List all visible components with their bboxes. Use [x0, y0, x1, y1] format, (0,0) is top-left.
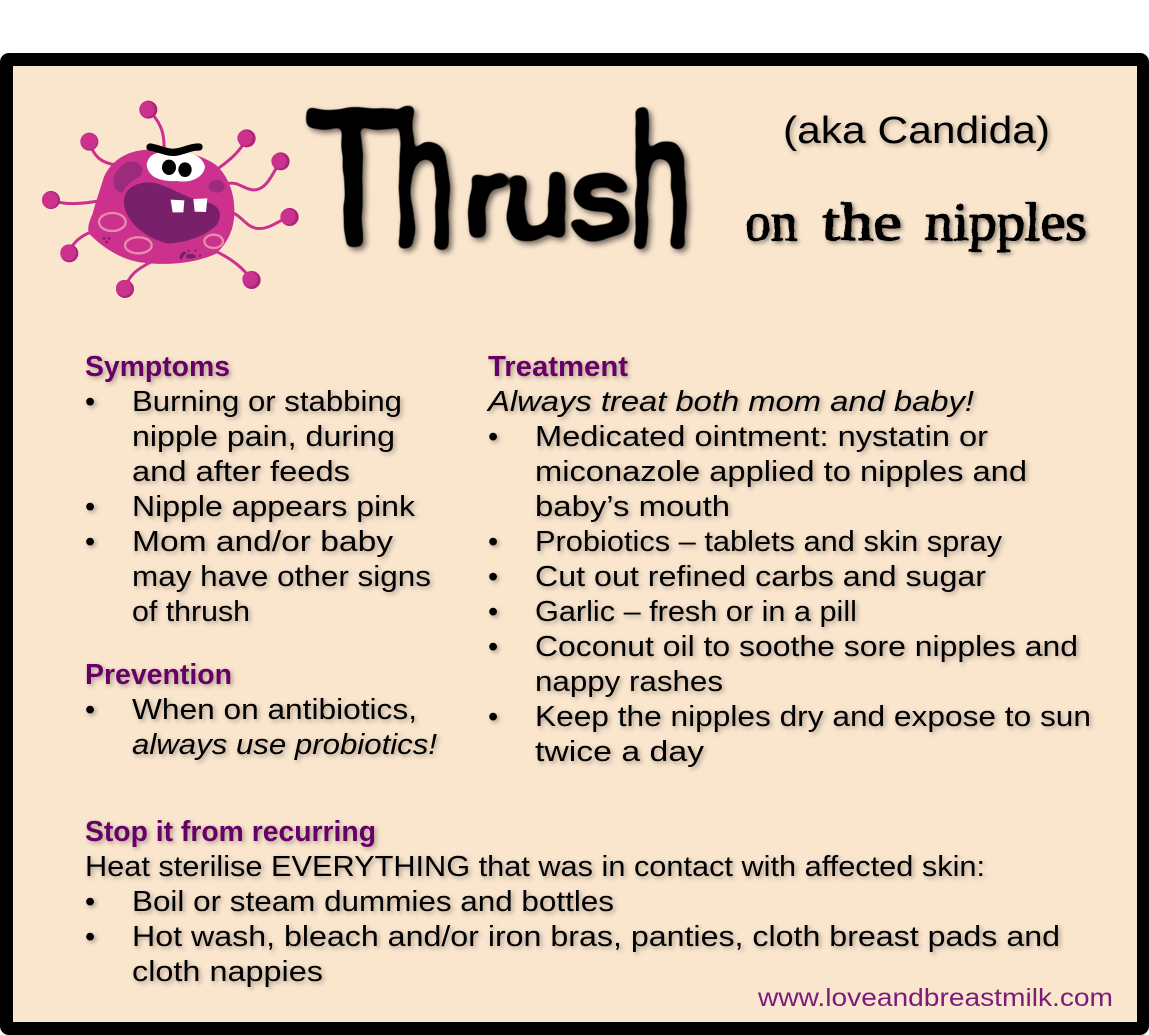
list: treatment: Probiotics – tablets and skin spray	[535, 526, 1003, 558]
icon: angry pink germ	[42, 101, 299, 298]
website credit: www.loveandbreastmilk.com	[757, 984, 1113, 1012]
heading: prevention: Prevention	[85, 659, 232, 691]
panel: symptoms	[85, 351, 431, 628]
panel: treatment	[486, 351, 1091, 768]
subtitle: on the nipples	[745, 192, 1087, 252]
list: recurring: cloth nappies	[132, 956, 323, 988]
list: symptoms	[85, 386, 431, 628]
list: treatment	[488, 421, 1091, 768]
heading: treatment: Treatment	[488, 351, 628, 383]
list: treatment: Medicated ointment: nystatin or	[535, 421, 988, 453]
germ tips	[42, 101, 299, 298]
list: treatment: baby’s mouth	[535, 491, 730, 523]
subtitle: aka Candida: (aka Candida)	[783, 110, 1050, 152]
list: treatment: •	[488, 596, 498, 628]
list: treatment: Coconut oil to soothe sore nipples and	[535, 631, 1078, 663]
title: Thrush: h	[630, 75, 690, 287]
list: treatment: miconazole applied to nipples and	[535, 456, 1027, 488]
panel: stop it from recurring	[85, 816, 1060, 988]
title: Thrush	[305, 68, 690, 288]
list: symptoms: Mom and/or baby	[132, 526, 394, 558]
list: treatment: •	[488, 561, 498, 593]
list: treatment: twice a day	[535, 736, 705, 768]
list: treatment: •	[488, 526, 498, 558]
title: Thrush: rus	[464, 135, 630, 260]
list: treatment: Garlic – fresh or in a pill	[535, 596, 857, 628]
subtitle: on the nipples: on	[745, 192, 797, 252]
list: recurring: •	[85, 921, 95, 953]
panel: prevention	[85, 659, 437, 761]
heading: symptoms: Symptoms	[85, 351, 230, 383]
list: symptoms: of thrush	[132, 596, 250, 628]
subtitle: on the nipples: nipples	[925, 192, 1087, 252]
list: treatment: Cut out refined carbs and sugar	[535, 561, 986, 593]
list: treatment: •	[488, 701, 498, 733]
list: recurring	[85, 886, 1060, 988]
subtitle: on the nipples: the	[822, 192, 902, 252]
list: prevention: When on antibiotics,	[132, 694, 417, 726]
list: symptoms: •	[85, 386, 95, 418]
list: prevention: always use probiotics!	[132, 729, 437, 761]
list: recurring: •	[85, 886, 95, 918]
title: Thrush: h	[394, 75, 454, 287]
note: treat both: Always treat both mom and baby!	[486, 386, 974, 418]
list: symptoms: may have other signs	[132, 561, 431, 593]
list: symptoms: Nipple appears pink	[132, 491, 416, 523]
list: treatment: nappy rashes	[535, 666, 723, 698]
list: symptoms: •	[85, 491, 95, 523]
list: recurring: Boil or steam dummies and bottles	[132, 886, 614, 918]
list: prevention: •	[85, 694, 95, 726]
list: recurring: Hot wash, bleach and/or iron bras, panties, cloth breast pads and	[132, 921, 1060, 953]
heading: recurring: Stop it from recurring	[85, 816, 376, 848]
list: treatment: Keep the nipples dry and expose to sun	[535, 701, 1091, 733]
list: symptoms: and after feeds	[132, 456, 350, 488]
list: symptoms: nipple pain, during	[132, 421, 395, 453]
list: treatment: •	[488, 421, 498, 453]
intro text: recurring: Heat sterilise EVERYTHING that was in contact with affected skin:	[85, 851, 985, 883]
list: symptoms: Burning or stabbing	[132, 386, 402, 418]
list: symptoms: •	[85, 526, 95, 558]
list: prevention	[85, 694, 437, 761]
title: Thrush: T	[305, 68, 400, 288]
list: treatment: •	[488, 631, 498, 663]
